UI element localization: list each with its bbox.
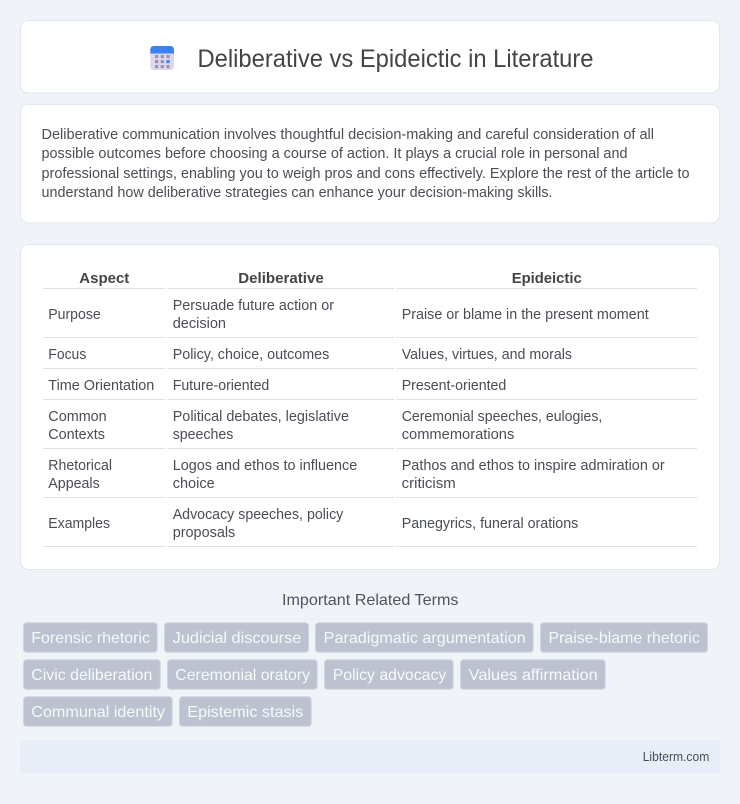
row: common contexts: Contexts bbox=[48, 427, 105, 443]
row: common contexts: Common bbox=[48, 409, 107, 425]
panel: title header bbox=[20, 20, 720, 93]
tag: ceremonial oratory: Ceremonial oratory bbox=[175, 667, 310, 684]
row: examples: Panegyrics, funeral orations bbox=[402, 516, 578, 532]
tag: civic deliberation bbox=[24, 660, 160, 689]
panel: introduction bbox=[20, 104, 720, 223]
row: rhetorical appeals: Pathos and ethos to inspire admiration or bbox=[402, 458, 665, 474]
table header row: Aspect bbox=[79, 270, 129, 287]
row: focus: Focus bbox=[48, 347, 86, 363]
row: focus bbox=[48, 347, 572, 363]
row: examples: proposals bbox=[173, 525, 235, 541]
row: time orientation: Present-oriented bbox=[402, 378, 506, 394]
row: examples: Examples bbox=[48, 516, 110, 532]
row: examples bbox=[48, 507, 578, 541]
row: purpose: Praise or blame in the present moment bbox=[402, 307, 649, 323]
tag: epistemic stasis: Epistemic stasis bbox=[187, 704, 303, 721]
row: common contexts: commemorations bbox=[402, 427, 514, 443]
tag: praise-blame rhetoric bbox=[540, 623, 708, 652]
row: purpose: decision bbox=[173, 316, 226, 332]
row: rhetorical appeals: Rhetorical bbox=[48, 458, 112, 474]
row: common contexts: speeches bbox=[173, 427, 233, 443]
table header row bbox=[79, 270, 582, 287]
row: rhetorical appeals: Logos and ethos to influence bbox=[173, 458, 357, 474]
tag: values affirmation: Values affirmation bbox=[469, 667, 598, 684]
row: purpose bbox=[48, 298, 649, 332]
tag: policy advocacy bbox=[324, 660, 453, 689]
row: rhetorical appeals: choice bbox=[173, 476, 215, 492]
text block: introduction: Deliberative communication involves thoughtful decision-making and careful consideration of all bbox=[42, 127, 654, 143]
tag: communal identity bbox=[24, 697, 172, 726]
row: rhetorical appeals: Appeals bbox=[48, 476, 100, 492]
tag: paradigmatic argumentation bbox=[316, 623, 533, 652]
text block: introduction: possible outcomes before choosing a course of action. It plays a crucial role in personal and bbox=[42, 146, 628, 162]
tag: civic deliberation: Civic deliberation bbox=[31, 667, 152, 684]
row: purpose: Purpose bbox=[48, 307, 101, 323]
text block: introduction: understand how deliberative strategies can enhance your decision-making skills. bbox=[42, 185, 552, 201]
icon: calendar bbox=[150, 46, 174, 70]
row: time orientation bbox=[48, 378, 506, 394]
row: examples: Advocacy speeches, policy bbox=[173, 507, 344, 523]
row: focus: Values, virtues, and morals bbox=[402, 347, 572, 363]
tag: forensic rhetoric bbox=[24, 623, 157, 652]
title: Deliberative vs Epideictic in Literature bbox=[198, 46, 594, 73]
row: purpose: Persuade future action or bbox=[173, 298, 334, 314]
panel: comparison table bbox=[20, 244, 720, 570]
footer credit: Libterm.com bbox=[643, 749, 709, 764]
tag: communal identity: Communal identity bbox=[31, 704, 165, 721]
row: time orientation: Future-oriented bbox=[173, 378, 269, 394]
row: rhetorical appeals bbox=[48, 458, 665, 492]
tag: judicial discourse bbox=[164, 623, 308, 652]
heading: important related terms: Important Related Terms bbox=[282, 592, 458, 609]
tag: ceremonial oratory bbox=[168, 660, 317, 689]
text block: introduction bbox=[42, 127, 690, 201]
table header row: Epideictic bbox=[512, 270, 582, 287]
row: common contexts: Ceremonial speeches, eulogies, bbox=[402, 409, 602, 425]
row: common contexts bbox=[48, 409, 602, 443]
row: focus: Policy, choice, outcomes bbox=[173, 347, 329, 363]
row: common contexts: Political debates, legislative bbox=[173, 409, 349, 425]
tag: paradigmatic argumentation: Paradigmatic argumentation bbox=[324, 630, 526, 647]
tag: praise-blame rhetoric: Praise-blame rhetoric bbox=[548, 630, 700, 647]
related terms tags bbox=[24, 623, 708, 726]
footer bbox=[20, 740, 720, 774]
tag: epistemic stasis bbox=[180, 697, 311, 726]
table header row: Deliberative bbox=[238, 270, 324, 287]
tag: forensic rhetoric: Forensic rhetoric bbox=[31, 630, 150, 647]
row: time orientation: Time Orientation bbox=[48, 378, 154, 394]
tag: policy advocacy: Policy advocacy bbox=[333, 667, 446, 684]
text block: introduction: professional settings, enabling you to weigh pros and cons effectively. Explore the rest of the article to bbox=[42, 166, 690, 182]
row: rhetorical appeals: criticism bbox=[402, 476, 456, 492]
tag: values affirmation bbox=[460, 660, 605, 689]
tag: judicial discourse: Judicial discourse bbox=[173, 630, 301, 647]
